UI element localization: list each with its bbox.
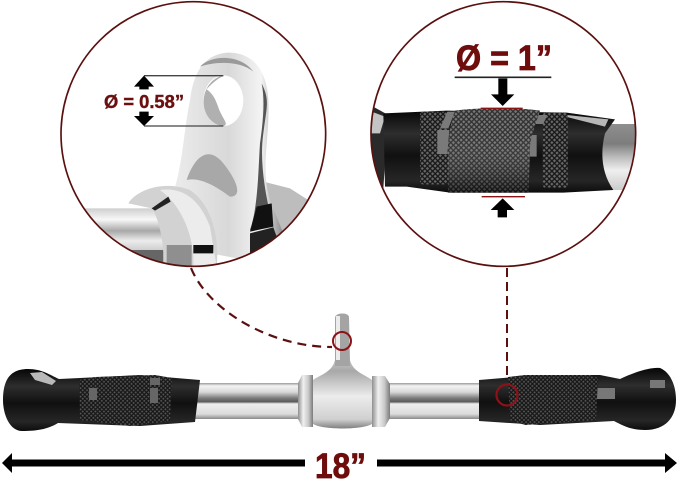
collar [128, 186, 217, 267]
connector: grip dashed line [506, 268, 508, 378]
left ferrule [372, 108, 386, 188]
lug hole [203, 75, 243, 126]
lug [335, 314, 350, 366]
centre knurl [448, 108, 540, 193]
panel: grip diameter detail circle [370, 2, 640, 266]
grip arrows [491, 78, 514, 217]
dimension lines [144, 76, 223, 126]
left tube [195, 383, 300, 419]
label: grip diameter: Ø = 1” [456, 39, 552, 78]
left handle [3, 369, 200, 431]
black grip [383, 111, 615, 193]
circle outline [61, 2, 326, 266]
dimension arrows [134, 76, 154, 126]
right knurl [508, 375, 598, 425]
red width marks [481, 108, 525, 197]
right background hub [266, 182, 308, 231]
arrow: total length left [2, 453, 305, 473]
product: straight bar [3, 314, 676, 431]
gaps [437, 112, 547, 157]
right handle [479, 368, 676, 430]
right tube [385, 383, 485, 419]
marker: grip circle [496, 384, 518, 406]
lug plate [173, 53, 283, 260]
left knurl ring [420, 112, 448, 184]
collars [298, 375, 313, 427]
tube [83, 208, 170, 253]
measure line [455, 75, 551, 80]
label: hole diameter: Ø = 0.58” [104, 92, 184, 112]
arrow: total length right [377, 453, 677, 473]
right knurl ring [543, 113, 568, 188]
connector: lug dashed line [191, 268, 332, 347]
marker: lug circle [333, 332, 351, 350]
left knurl [79, 375, 172, 426]
circle outline [371, 2, 636, 266]
hub [313, 314, 372, 428]
panel: lug hole detail circle [61, 2, 326, 267]
pipe [602, 124, 635, 190]
